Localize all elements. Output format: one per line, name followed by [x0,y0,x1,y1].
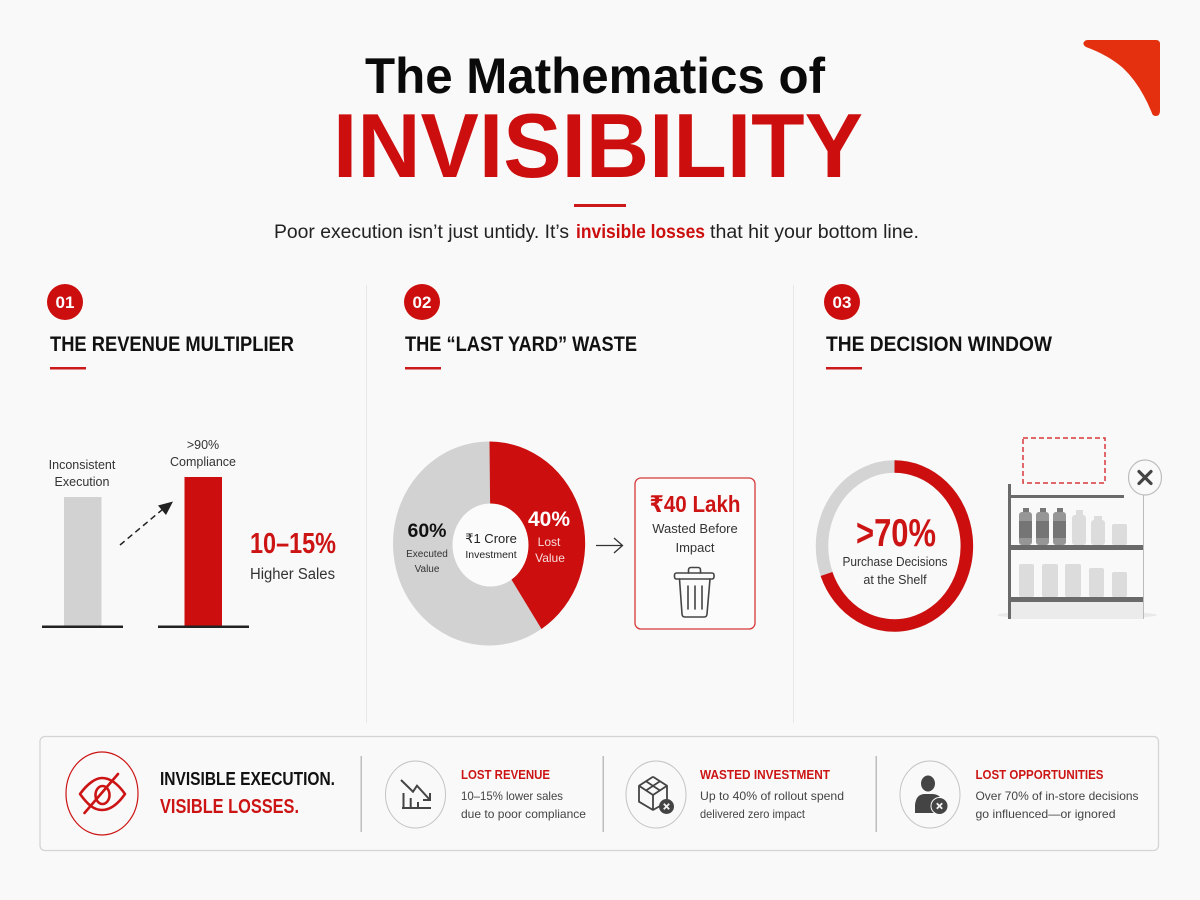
icon: person with x [900,761,960,828]
label: 1 crore investment: ₹1 Crore [465,531,517,546]
label: compliance: >90% [187,438,219,452]
item: lost revenue: due to poor compliance [461,807,586,821]
bar: inconsistent execution [64,497,102,627]
ring remainder [822,466,967,626]
donut hole [452,504,528,586]
label: 60% executed value: Executed [406,549,448,560]
callout: 40 lakh wasted: Impact [675,540,715,555]
segment: lost value 40% [490,442,585,629]
panel: the decision window [822,284,1162,626]
title underline [574,204,626,207]
tagline: INVISIBLE EXECUTION. [160,769,335,789]
item: wasted investment [626,761,844,828]
label: 40% lost value: 40% [528,508,570,531]
number badge 02: 02 [413,293,431,312]
ring chart [822,466,967,626]
icon: falling chart [386,761,446,828]
summary panel [40,736,1158,850]
tagline [160,769,335,818]
number badge 02 [404,284,440,320]
number badge 03 [824,284,860,320]
light products upper shelf [1072,510,1127,545]
number badge 01 [47,284,83,320]
ring 70 percent [826,466,967,625]
heading: THE REVENUE MULTIPLIER [50,333,294,356]
stat: higher sales: 10–15% [250,528,336,560]
item: wasted investment: WASTED INVESTMENT [700,768,830,782]
item: lost opportunities [900,761,1138,828]
label: 40% lost value [528,508,570,565]
number badge 01: 01 [56,293,74,312]
callout: 40 lakh wasted: Wasted Before [652,521,738,536]
title highlight: INVISIBILITY [333,96,863,197]
label: 60% executed value [406,520,448,575]
illustration: store shelf [997,438,1162,619]
label: compliance [170,438,236,469]
stat: higher sales [250,528,336,583]
label: inconsistent execution: Execution [55,475,109,489]
label: 40% lost value: Lost [538,535,561,549]
label: 40% lost value: Value [535,551,565,565]
label: compliance: Compliance [170,455,236,469]
shelf floor shadow [997,611,1157,619]
item: lost revenue [386,761,586,828]
label: purchase decisions [842,555,948,587]
bar: compliance [184,477,222,627]
label: over 70%: >70% [856,512,936,555]
icon: red corner accent [1083,40,1160,116]
label: purchase decisions: Purchase Decisions [842,555,948,569]
label: 60% executed value: Value [415,564,440,575]
item: wasted investment: Up to 40% of rollout spend [700,789,844,803]
item: lost opportunities: LOST OPPORTUNITIES [976,768,1104,782]
item: lost revenue: LOST REVENUE [461,768,550,782]
icon: box with x [626,761,686,828]
stat: higher sales: Higher Sales [250,566,335,583]
baseline right [158,626,249,628]
label: inconsistent execution [49,458,116,489]
heading underline [405,367,441,370]
arrow: to wasted callout [596,538,622,553]
number badge 03: 03 [833,293,851,312]
segment: executed value 60% [393,442,585,646]
light products lower shelf [1019,564,1127,597]
panel: the revenue multiplier [42,284,336,628]
item: lost opportunities: Over 70% of in-store decisions [976,789,1138,803]
label: inconsistent execution: Inconsistent [49,458,116,472]
icon: x marker [1128,460,1162,495]
arrow: dashed upward [120,502,173,545]
callout: 40 lakh wasted: ₹40 Lakh [650,491,740,517]
heading underline [826,367,862,370]
callout: 40 lakh wasted [635,478,755,629]
label: 60% executed value: 60% [407,520,447,542]
panel: the last yard waste [393,284,755,646]
subtitle: Poor execution isn’t just untidy. It’s [274,222,569,243]
header [274,48,919,243]
tagline: VISIBLE LOSSES. [160,796,299,818]
item: lost opportunities: go influenced—or ignored [976,807,1116,821]
heading: THE “LAST YARD” WASTE [405,333,637,356]
label: 1 crore investment [465,531,517,561]
icon: crossed-out eye [66,752,138,835]
baseline left [42,626,123,628]
heading underline [50,367,86,370]
dark bottles [1019,508,1066,545]
icon: trash can [674,568,714,617]
item: lost revenue: 10–15% lower sales [461,789,563,803]
missing display placeholder [1023,438,1105,483]
label: purchase decisions: at the Shelf [863,573,927,587]
label: 1 crore investment: Investment [465,549,517,561]
subtitle [274,222,919,243]
item: wasted investment: delivered zero impact [700,807,806,821]
title line: The Mathematics of [365,48,825,104]
donut chart [393,442,585,646]
heading: THE DECISION WINDOW [826,333,1052,356]
subtitle: invisible losses [576,222,705,243]
bar chart [42,438,249,628]
subtitle: that hit your bottom line. [710,222,919,243]
shelf frame [1008,484,1143,619]
